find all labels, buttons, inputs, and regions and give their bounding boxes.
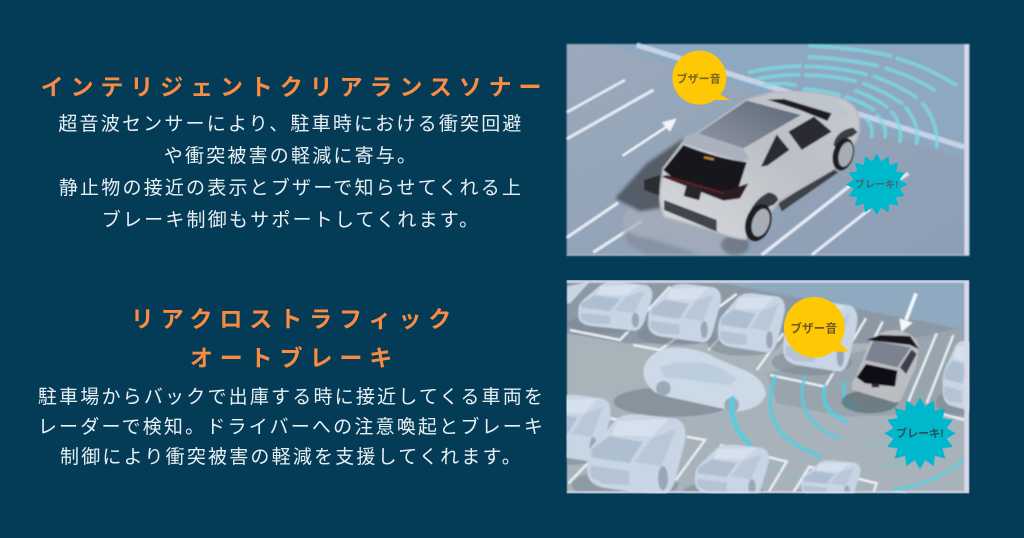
heading: intelligent clearance sonar: インテリジェントクリアランスソナー: [41, 74, 548, 100]
heading: rear cross traffic auto brake: オートブレーキ: [190, 345, 399, 371]
text block: rear cross traffic description: [38, 387, 545, 468]
heading: rear cross traffic auto brake: [131, 306, 458, 371]
radar waves: [732, 377, 964, 490]
text block: sonar description: ブレーキ制御もサポートしてくれます。: [102, 210, 480, 230]
callout: brake: ブレーキ!: [855, 178, 898, 191]
car ghost reflection: [615, 138, 749, 255]
text block: rear cross traffic description: レーダーで検知。ドライバーへの注意喚起とブレーキ: [38, 417, 545, 438]
car: silver SUV: [644, 92, 859, 245]
callout: buzzer: ブザー音: [790, 322, 837, 336]
text block: sonar description: [58, 114, 524, 230]
text block: rear cross traffic description: 駐車場からバックで出庫する時に接近してくる車両を: [38, 387, 545, 408]
parking lines: [568, 287, 964, 493]
heading: rear cross traffic auto brake: リアクロストラフィック: [131, 306, 458, 332]
reversing car: [842, 330, 919, 413]
illustration: rear cross traffic scene: [566, 280, 970, 494]
callout: buzzer: ブザー音: [677, 71, 721, 85]
arrow: reversing car marker: [899, 293, 916, 332]
parked cars: [566, 282, 970, 494]
centre sedan: [613, 348, 766, 417]
arrow: direction of travel: [623, 118, 677, 156]
text block: sonar description: や衝突被害の軽減に寄与。: [164, 146, 418, 167]
callout: buzzer: [672, 51, 730, 105]
text block: rear cross traffic description: 制御により衝突被害の軽減を支援してくれます。: [60, 447, 523, 468]
illustration: parking sonar scene: [565, 42, 970, 258]
callout: brake: [884, 398, 956, 469]
callout: brake: ブレーキ!: [896, 426, 944, 440]
panel: intelligent clearance sonar text: [41, 74, 548, 230]
text block: sonar description: 静止物の接近の表示とブザーで知らせてくれる上: [59, 178, 523, 198]
panel: rear cross traffic auto brake text: [38, 306, 545, 468]
callout: buzzer: [784, 297, 849, 358]
callout: brake: [846, 154, 907, 215]
sonar waves: [749, 46, 956, 147]
text block: sonar description: 超音波センサーにより、駐車時における衝突回避: [58, 114, 524, 135]
